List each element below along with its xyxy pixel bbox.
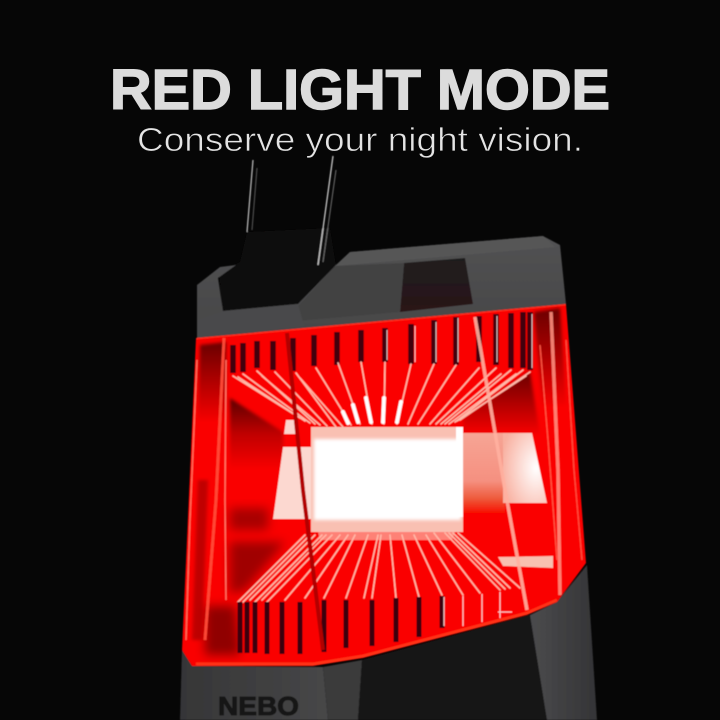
lower centre strip — [323, 660, 362, 720]
central light core — [314, 439, 461, 520]
upper fin ray glow — [343, 398, 401, 423]
bottom lens edge — [196, 600, 557, 664]
subtitle: Conserve your night vision. — [137, 121, 583, 158]
upper fin highlights — [387, 314, 532, 368]
right horizontal reflection — [498, 556, 553, 568]
red base — [175, 300, 595, 670]
lantern — [175, 156, 597, 720]
lower dark centre — [358, 615, 547, 720]
central light panel — [311, 427, 463, 532]
left side vertical streaks — [186, 338, 226, 640]
top lens edge — [196, 304, 566, 338]
gray top housing — [197, 236, 566, 338]
top left dark column — [198, 342, 226, 420]
dark area under upper fins left — [230, 398, 283, 470]
left glass streak — [287, 333, 323, 650]
right side bright panel — [503, 433, 547, 503]
dark area lower left corner — [205, 606, 240, 655]
top right dark column — [534, 308, 566, 405]
lower left leg — [180, 650, 328, 720]
lower fin slits — [240, 596, 442, 654]
right side orange panel — [458, 433, 505, 513]
red lens — [175, 300, 595, 670]
lower fins — [196, 532, 557, 664]
dark area left of lower panel — [230, 508, 268, 530]
dark band inside left column — [192, 480, 208, 640]
title: RED LIGHT MODE — [110, 58, 610, 122]
dark area under upper fins right — [463, 372, 540, 436]
dark area left of lower fins — [230, 542, 285, 594]
upper fin slits — [233, 312, 530, 373]
lower fin top glow — [318, 532, 455, 540]
upper fins — [233, 312, 532, 427]
left side light panel — [273, 447, 313, 519]
upper fin rays — [233, 362, 530, 427]
right glass streak — [475, 317, 527, 610]
small triangle above left panel — [284, 420, 296, 434]
lower fin highlights — [444, 592, 512, 626]
right side vertical streaks — [540, 312, 582, 595]
lower right leg — [530, 565, 597, 720]
handle — [219, 156, 336, 311]
lower fin rays — [238, 533, 520, 602]
infographic canvas — [113, 68, 608, 720]
central light right edge — [456, 427, 463, 517]
